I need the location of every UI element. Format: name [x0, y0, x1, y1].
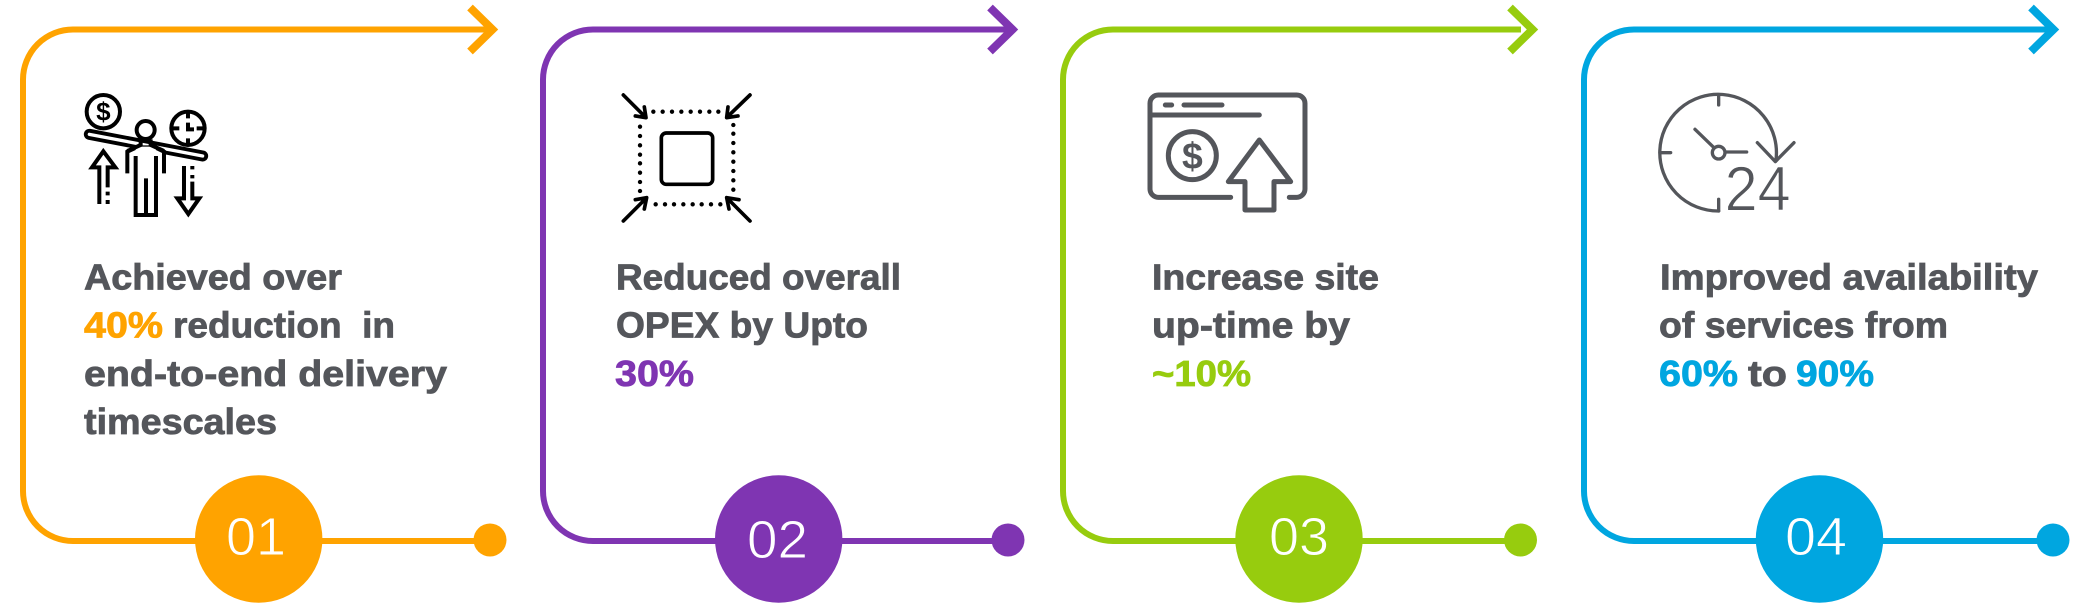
end dot — [2036, 524, 2070, 556]
text block: achievement — [84, 256, 447, 442]
panel: 01 delivery timescales — [23, 8, 506, 603]
text block: availability — [1659, 256, 2038, 394]
number badge 04: 04 — [1785, 507, 1847, 567]
panel: 04 service availability — [1584, 8, 2070, 603]
number badge 02 — [715, 475, 842, 603]
text block: achievement: reduction in — [173, 304, 395, 346]
text block: availability: of services from — [1659, 304, 1948, 346]
text block: availability: 90% — [1796, 353, 1874, 394]
number badge 04 — [1756, 475, 1883, 603]
route line with arrow — [23, 8, 492, 541]
icon: person balancing money and time: $ — [96, 97, 111, 127]
panel: 02 OPEX — [543, 8, 1024, 603]
route line with arrow — [1584, 8, 2054, 541]
text block: availability: 60% — [1659, 353, 1738, 394]
icon: browser window with dollar and up arrow: $ — [1182, 135, 1203, 177]
icon: browser window with dollar and up arrow — [1150, 95, 1305, 210]
number badge 02: 02 — [747, 510, 808, 570]
text block: OPEX reduction: Reduced overall — [616, 256, 901, 298]
text block: up-time: ~10% — [1152, 353, 1251, 394]
end dot — [992, 524, 1024, 556]
route line with arrow — [1063, 8, 1532, 541]
text block: achievement: 40% — [84, 304, 163, 346]
text block: achievement: Achieved over — [84, 256, 342, 298]
number badge 01 — [195, 475, 322, 603]
number badge 01: 01 — [226, 507, 286, 567]
icon: 24 hour clock: 24 — [1725, 155, 1791, 225]
number badge 03: 03 — [1269, 507, 1329, 567]
end dot — [474, 524, 506, 556]
end dot — [1504, 524, 1537, 556]
text block: up-time: Increase site — [1152, 256, 1379, 298]
icon: shrinking square with inward arrows — [623, 95, 750, 221]
route line with arrow — [543, 8, 1012, 541]
text block: OPEX reduction: 30% — [615, 353, 694, 394]
text block: up-time — [1152, 256, 1379, 394]
text block: up-time: up-time by — [1152, 304, 1350, 346]
text block: availability: to — [1748, 353, 1787, 394]
icon: person balancing money and time — [87, 95, 205, 215]
text block: achievement: timescales — [84, 401, 277, 442]
text block: OPEX reduction: OPEX by Upto — [616, 304, 868, 346]
icon: 24 hour clock — [1660, 94, 1794, 225]
text block: OPEX reduction — [615, 256, 901, 394]
number badge 03 — [1235, 475, 1363, 603]
text block: availability: Improved availability — [1660, 256, 2038, 298]
text block: achievement: end-to-end delivery — [84, 353, 447, 394]
panel: 03 site up-time — [1063, 8, 1537, 603]
